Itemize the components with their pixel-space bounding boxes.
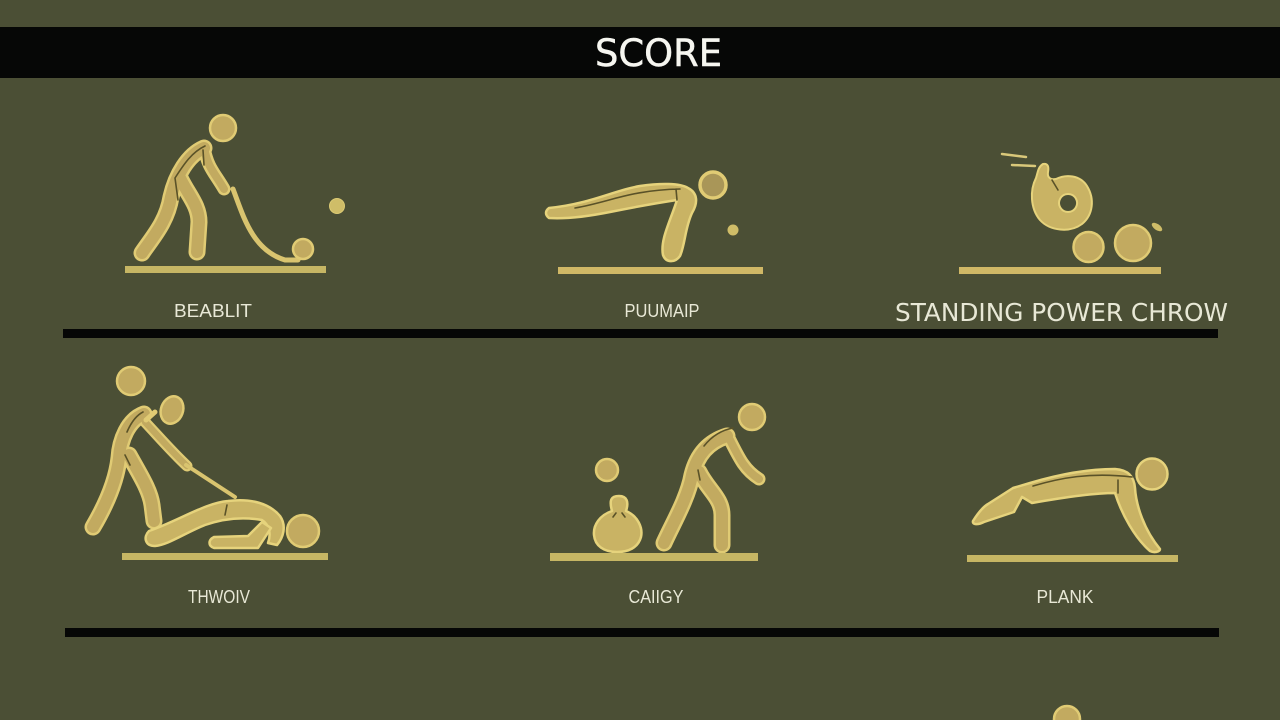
icon: head of cropped figure [1054,706,1080,720]
label: STANDING POWER CHROW [895,298,1228,327]
icon: power throw figure [959,154,1164,274]
panel: exercise 6 [967,458,1178,607]
panel: exercise 3 [895,154,1228,327]
title bar [0,27,1280,78]
panel: exercise 5 [550,404,765,607]
label: THWOIV [188,587,250,607]
label: CAIIGY [628,587,684,607]
icon: plank figure [967,458,1178,562]
divider [65,628,1219,637]
icon: figure swinging a club [125,115,344,273]
title: SCORE [595,32,722,75]
label: PLANK [1036,587,1094,607]
panel: exercise 2 [546,172,763,321]
label: BEABLIT [174,301,252,321]
label: PUUMAIP [624,301,700,321]
panel: exercise 1 [125,115,344,321]
icon: push-up figure [546,172,763,274]
panel: exercise 4 [93,367,328,607]
icon: figure with kettlebell [550,404,765,561]
icon: figure assisting a lying partner [93,367,328,560]
divider [63,329,1218,338]
